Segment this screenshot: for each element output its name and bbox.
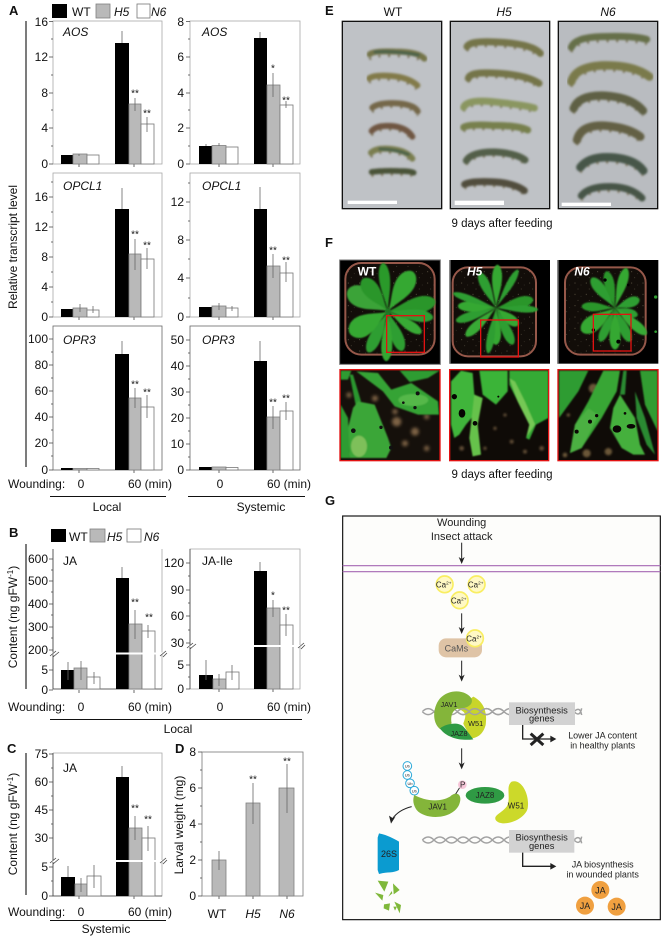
chart: OPCL1 systemic: 4 [177, 271, 184, 285]
panel A: transcript levels [6, 3, 311, 514]
cell membrane [343, 566, 660, 572]
chart: JA local: ** [145, 612, 153, 624]
DNA over complex [457, 709, 504, 715]
chart: OPCL1 local: 0 [41, 310, 48, 324]
chart: larval weight: 2 [189, 853, 196, 867]
chart: JA systemic: ** [131, 804, 139, 814]
chart: OPR3 systemic: 0 [177, 463, 184, 477]
calcium ions: Ca [436, 580, 446, 589]
DNA strand upper [422, 708, 582, 715]
chart: JA-Ile local: 60 [171, 609, 184, 623]
chart: JA-Ile local: 0 [177, 682, 184, 696]
chart: AOS systemic: 6 [177, 50, 184, 64]
ubiquitin chain: Ub [405, 764, 411, 769]
chart: larval weight: ** [249, 774, 257, 786]
biosynthesis genes box upper: Biosynthesis [515, 705, 568, 715]
x axis labels B: 0 [217, 700, 224, 714]
larvae headings: N6 [600, 5, 616, 19]
legend B: WT [69, 530, 88, 544]
CaMs complex: Ca [466, 634, 476, 643]
chart: JA local: ** [131, 598, 139, 608]
chart: OPCL1 systemic: 12 [171, 195, 184, 209]
x axis labels C [8, 905, 172, 936]
JAZ8 free: JAZ8 [476, 791, 495, 800]
JA molecules: JA [611, 902, 622, 912]
photo panels [340, 260, 658, 461]
arrow to proteasome [389, 807, 412, 824]
chart: JA systemic: 75 [35, 747, 48, 761]
biosynthesis genes box upper: genes [529, 714, 555, 724]
chart: JA local: 600 [28, 552, 48, 566]
chart: JA local: 400 [28, 597, 48, 611]
y axis label: Relative transcript level [6, 185, 20, 309]
text: JA biosynthesis: JA biosynthesis [572, 860, 634, 870]
x axis labels B: 0 [78, 700, 85, 714]
larvae headings: H5 [496, 5, 512, 19]
chart: OPR3 systemic: 50 [171, 333, 184, 347]
calcium ions: 2+ [478, 580, 484, 585]
JAV1 W51 JAZ8 complex: JAZ8 [450, 729, 468, 738]
chart: larval weight: ** [283, 756, 291, 768]
active arrow [523, 853, 556, 870]
chart: larval weight: N6 [279, 907, 295, 921]
JAV1 phosphorylated: JAV1 [428, 802, 447, 811]
panel letter E: E [325, 3, 334, 18]
chart: AOS systemic: 0 [177, 157, 184, 171]
legend B [51, 529, 160, 544]
chart: AOS local: 12 [35, 50, 48, 64]
biosynthesis genes box lower [509, 830, 574, 853]
panel letter A: A [9, 3, 19, 18]
close-up: H5 [449, 369, 549, 461]
y axis label C: ) [6, 773, 20, 777]
JA molecules: JA [595, 885, 606, 895]
JAV1 phosphorylated [413, 780, 467, 817]
legend B: H5 [107, 530, 123, 544]
chart: JA-Ile local: 5 [177, 658, 184, 672]
x axis labels A: Wounding: [8, 477, 65, 491]
chart: JA-Ile local: JA-Ile [202, 554, 233, 568]
chart: JA systemic: 45 [35, 803, 48, 817]
arrow: CaMs to JAV1 complex [459, 661, 465, 682]
26S proteasome [378, 833, 399, 874]
caption E: 9 days after feeding [451, 218, 553, 230]
calcium ions: 2+ [461, 596, 467, 601]
chart: JA-Ile local: ** [282, 606, 290, 616]
chart: OPR3 systemic: OPR3 [202, 333, 235, 347]
chart: JA local: 5 [41, 663, 48, 677]
chart: OPCL1 systemic: ** [282, 256, 290, 266]
CaMs complex: CaMs [445, 644, 469, 654]
chart: OPR3 local: 40 [35, 410, 48, 424]
x axis labels A: 60 (min) [128, 477, 172, 491]
ubiquitin chain [403, 762, 419, 795]
chart: larval weight: 8 [189, 745, 196, 759]
biosynthesis genes box lower: genes [529, 841, 555, 851]
calcium ions: Ca [468, 580, 478, 589]
chart: OPCL1 local: ** [131, 230, 139, 240]
close-up: N6 [558, 369, 658, 461]
plant photo: H5: H5 [467, 265, 483, 279]
chart: OPR3 local: OPR3 [63, 333, 96, 347]
diagram frame [343, 516, 660, 920]
JAV1 W51 JAZ8 complex: W51 [468, 719, 483, 728]
plant photo: WT: WT [358, 265, 377, 279]
chart: larval weight: 0 [189, 889, 196, 903]
chart: AOS local: 16 [35, 15, 48, 29]
panel D: larval weight [172, 741, 303, 921]
panel F: leaf damage photographs [325, 235, 658, 481]
ubiquitin chain: Ub [405, 773, 411, 778]
plant photo: N6 [557, 260, 658, 364]
chart: OPCL1 local: 16 [35, 190, 48, 204]
photo: H5 larvae [450, 21, 550, 209]
calcium ions: Ca [451, 596, 461, 605]
x axis labels B: Wounding: [8, 700, 65, 714]
x axis labels C: 0 [78, 905, 85, 919]
CaMs complex [439, 630, 483, 657]
legend B: N6 [144, 530, 160, 544]
chart: AOS systemic: AOS [201, 25, 227, 39]
legend A: H5 [114, 5, 130, 19]
y axis label C: -1 [6, 776, 15, 784]
text: lower JA content: Lower JA content [568, 731, 638, 741]
chart: OPR3 local: 80 [35, 358, 48, 372]
arrow: calcium to CaMs [459, 613, 465, 634]
chart: AOS systemic: 4 [177, 86, 184, 100]
chart: JA local: 500 [28, 574, 48, 588]
y axis label C [6, 753, 26, 895]
W51 free: W51 [508, 802, 525, 811]
biosynthesis genes box lower: Biosynthesis [515, 833, 568, 843]
JA molecules: JA [580, 901, 590, 911]
chart: OPCL1 systemic: 8 [177, 233, 184, 247]
x axis labels C: Systemic [82, 922, 130, 936]
chart: AOS local: ** [131, 88, 139, 100]
chart: JA local: JA [63, 554, 77, 568]
chart: OPR3 systemic: 20 [171, 411, 184, 425]
chart: larval weight: 4 [189, 817, 196, 831]
text: lower JA content [568, 731, 638, 751]
stimulus text: Wounding [437, 517, 486, 529]
panel letter B: B [9, 525, 18, 540]
calcium ions: 2+ [446, 580, 452, 585]
blocked arrow [523, 725, 556, 745]
photo: WT larvae [342, 21, 442, 209]
calcium ions [436, 576, 485, 609]
larvae headings [384, 5, 616, 19]
chart: JA systemic: JA [63, 761, 77, 775]
degraded fragments [375, 881, 401, 913]
y axis label B: ) [6, 566, 20, 570]
chart: OPCL1 local: OPCL1 [63, 179, 102, 193]
y axis label B: Content (ng gFW [6, 577, 20, 668]
panel G: signalling model [325, 493, 660, 920]
chart: JA systemic: ** [144, 814, 152, 826]
chart: larval weight: WT [208, 907, 227, 921]
chart: JA local [28, 549, 167, 697]
x axis labels A: 0 [78, 477, 85, 491]
x axis labels B: 60 (min) [128, 700, 172, 714]
chart: OPR3 systemic: 40 [171, 359, 184, 373]
x axis labels B: Local [164, 722, 192, 736]
chart: JA-Ile local: 90 [171, 583, 184, 597]
chart: OPR3 systemic: ** [282, 394, 290, 404]
chart: AOS local: 8 [41, 86, 48, 100]
model diagram [343, 516, 660, 920]
x axis labels A: 60 (min) [267, 477, 311, 491]
chart: OPR3 local: 20 [35, 436, 48, 450]
chart: OPR3 systemic: 30 [171, 385, 184, 399]
plant photo: N6: N6 [574, 265, 590, 279]
chart: JA local: 200 [28, 643, 48, 657]
chart: AOS systemic: * [271, 64, 275, 74]
x axis labels C: 60 (min) [128, 905, 172, 919]
JAV1 W51 JAZ8 complex [434, 691, 486, 740]
chart: larval weight: H5 [245, 907, 261, 921]
chart: JA-Ile local: 30 [171, 636, 184, 650]
stimulus text: Insect attack [431, 531, 493, 543]
legend A: WT [72, 5, 91, 19]
legend A: N6 [151, 5, 167, 19]
chart: AOS local: 4 [41, 121, 48, 135]
ubiquitin chain: Ub [412, 788, 418, 793]
x axis labels A: 0 [217, 477, 224, 491]
chart: OPR3 local: 100 [28, 332, 48, 346]
chart: JA systemic [35, 747, 167, 903]
26S proteasome: 26S [381, 849, 397, 859]
JA molecules [576, 881, 626, 916]
photo: N6 larvae [558, 21, 658, 209]
arrow: complex dissociation [459, 748, 465, 769]
panel letter C: C [7, 741, 17, 756]
plant photo: WT [340, 260, 440, 364]
chart: OPR3 local: ** [131, 380, 139, 390]
photo panels [342, 21, 658, 209]
chart: larval weight [189, 745, 303, 921]
chart: JA systemic: 0 [41, 889, 48, 903]
x axis labels C: Wounding: [8, 905, 65, 919]
close-up: WT [340, 369, 440, 461]
chart: AOS systemic: 2 [177, 121, 184, 135]
chart: OPR3 local: ** [143, 388, 151, 398]
chart: JA-Ile local: 120 [164, 556, 184, 570]
chart: JA systemic: 5 [41, 860, 48, 874]
chart: AOS local: AOS [62, 25, 88, 39]
JAZ8 free [466, 787, 504, 804]
panel letter D: D [175, 741, 184, 756]
panel letter G: G [325, 493, 335, 508]
chart: AOS local: 0 [41, 157, 48, 171]
chart: OPCL1 local [35, 173, 162, 324]
caption F: 9 days after feeding [451, 469, 553, 481]
chart: AOS systemic: 8 [177, 15, 184, 29]
chart: OPCL1 systemic: ** [269, 246, 277, 256]
panel letter F: F [325, 235, 333, 250]
chart: JA local: 300 [28, 620, 48, 634]
chart: OPR3 local [28, 326, 162, 477]
chart: OPR3 systemic: ** [269, 398, 277, 408]
y axis label B [6, 544, 26, 689]
arrow: stimulus to calcium [459, 543, 465, 564]
W51 free [495, 781, 528, 823]
plant photo: H5 [449, 260, 550, 364]
x axis labels A: Systemic [237, 500, 285, 514]
JAV1 W51 JAZ8 complex: JAV1 [441, 700, 457, 709]
panel C: JA content systemic [6, 741, 172, 936]
chart: OPCL1 systemic [171, 173, 300, 324]
y axis label C: Content (ng gFW [6, 784, 20, 875]
text: JA biosynthesis [566, 860, 639, 880]
chart: OPCL1 systemic: 0 [177, 310, 184, 324]
panel E: larvae photographs [325, 3, 658, 230]
chart: OPR3 local: 0 [41, 463, 48, 477]
x axis labels A [8, 477, 311, 514]
chart: OPR3 systemic [171, 326, 300, 477]
x axis labels B [8, 700, 311, 736]
chart: JA systemic: 60 [35, 775, 48, 789]
x axis labels B: 60 (min) [267, 700, 311, 714]
chart: JA-Ile local [164, 549, 305, 696]
y axis label B: -1 [6, 569, 15, 577]
scale bar [348, 201, 397, 204]
text: JA biosynthesis: in wounded plants [566, 870, 639, 880]
x axis labels A: Local [93, 500, 121, 514]
chart: AOS systemic: ** [282, 96, 290, 106]
y axis label D: Larval weight (mg) [172, 776, 186, 874]
chart: OPCL1 systemic: OPCL1 [202, 179, 241, 193]
DNA strand lower [422, 837, 582, 843]
JAV1 phosphorylated: P [460, 781, 465, 790]
chart: JA local: 0 [41, 683, 48, 697]
text: lower JA content: in healthy plants [570, 741, 636, 751]
chart: JA-Ile local: * [271, 590, 275, 602]
biosynthesis genes box upper [509, 702, 575, 725]
chart: OPCL1 local: 8 [41, 250, 48, 264]
CaMs complex: 2+ [476, 634, 482, 639]
legend A [52, 4, 167, 19]
chart: AOS local [35, 15, 162, 171]
chart: OPCL1 local: 4 [41, 280, 48, 294]
scale bar [562, 203, 611, 206]
chart: JA systemic: 30 [35, 831, 48, 845]
chart: OPR3 systemic: 10 [171, 437, 184, 451]
scale bar [455, 201, 504, 205]
chart: larval weight: 6 [189, 781, 196, 795]
larvae headings: WT [384, 5, 403, 19]
panel B: JA content local [6, 525, 311, 736]
chart: OPR3 local: 60 [35, 384, 48, 398]
chart: AOS local: ** [143, 108, 151, 120]
chart: OPCL1 local: 12 [35, 220, 48, 234]
chart: AOS systemic [177, 15, 300, 171]
ubiquitin chain: Ub [407, 781, 413, 786]
chart: OPCL1 local: ** [143, 240, 151, 252]
stimulus text [431, 517, 493, 543]
